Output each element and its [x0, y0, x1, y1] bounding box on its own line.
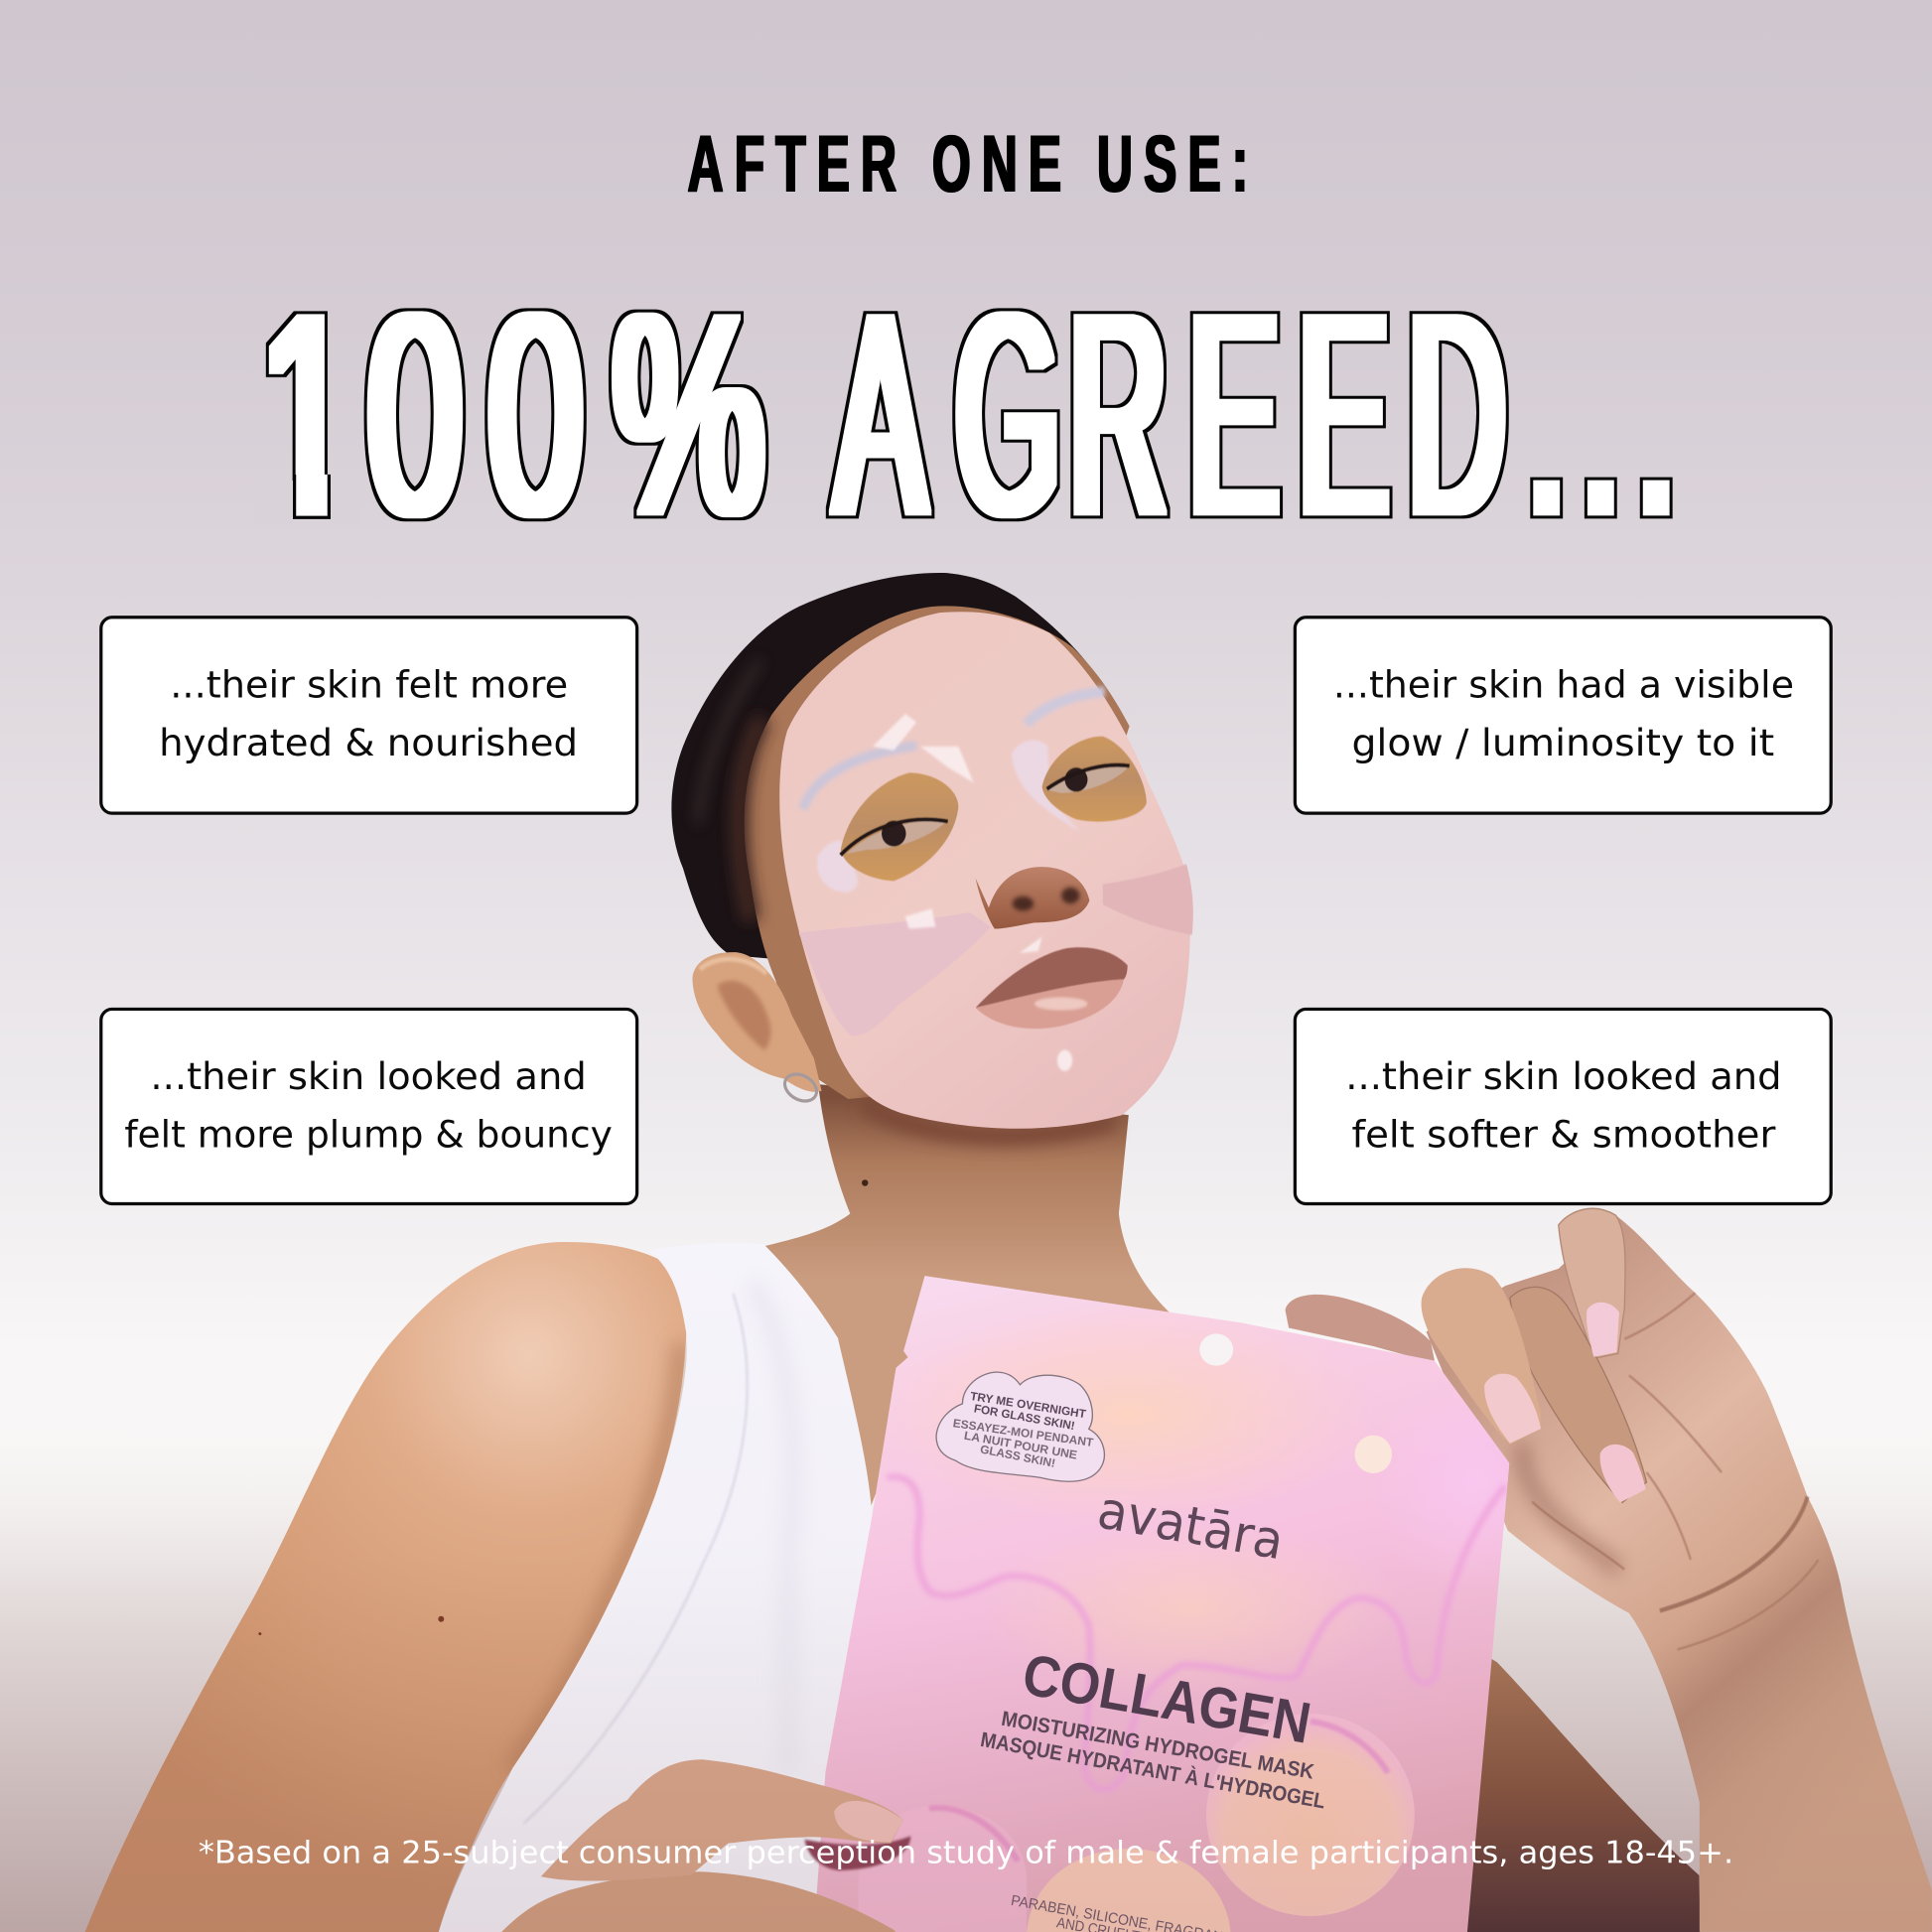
- nose opening: [976, 867, 1089, 929]
- package text: [952, 1390, 1327, 1932]
- product subtitle english: MOISTURIZING HYDROGEL MASK: [1000, 1708, 1316, 1784]
- right hand fingers over package: [1422, 1208, 1647, 1502]
- far upper arm: [1453, 1651, 1701, 1932]
- callout: softer: ...their skin looked and: [1345, 1054, 1782, 1098]
- sticker text: FOR GLASS SKIN!: [973, 1402, 1076, 1433]
- lips: [976, 947, 1128, 1029]
- hair shine: [698, 661, 760, 823]
- callout: softer: [1295, 1009, 1831, 1204]
- mask lower left flap: [799, 912, 991, 1036]
- index finger: [1286, 1295, 1435, 1363]
- hang hole: [1199, 1333, 1233, 1366]
- digit one base cover: [255, 475, 362, 525]
- finger front: [1422, 1268, 1541, 1445]
- left eye opening: [841, 772, 958, 881]
- main heading: [259, 254, 1675, 575]
- tank top fold: [523, 1294, 748, 1824]
- palm creases: [1532, 1293, 1819, 1649]
- ear: [692, 952, 822, 1092]
- forehead and side skin: [745, 606, 1130, 1099]
- sticker text: TRY ME OVERNIGHT: [969, 1390, 1088, 1421]
- cloud sticker: [936, 1372, 1104, 1481]
- white tank top: [439, 1243, 873, 1932]
- neck and chest: [761, 1084, 1182, 1528]
- mild overall bottom tint: [0, 1553, 1932, 1932]
- woman with sheet mask: [85, 573, 1932, 1932]
- callout: plump: [101, 1009, 637, 1204]
- brand name: avatāra: [1093, 1480, 1288, 1572]
- callout: glow: [1295, 618, 1831, 813]
- finger holding top: [1559, 1208, 1625, 1358]
- product package: [814, 1276, 1581, 1932]
- head group: [671, 573, 1193, 1136]
- hair: [671, 573, 1126, 961]
- lower hand finger two: [501, 1871, 896, 1932]
- callout: glow: ...their skin had a visible: [1333, 662, 1794, 706]
- callout: hydrated: [101, 618, 637, 813]
- nail 2: [1600, 1445, 1646, 1502]
- callout: plump: ...their skin looked and: [150, 1054, 587, 1098]
- hand and forearm: [1427, 1215, 1932, 1932]
- mask right flap: [1103, 864, 1193, 935]
- left brow under mask: [802, 746, 916, 809]
- earring: [780, 1069, 821, 1106]
- arm moles: [258, 1616, 444, 1635]
- right eye opening: [1042, 737, 1147, 822]
- lower hand index finger: [541, 1759, 903, 1881]
- small heading: AFTER ONE USE:: [688, 119, 1248, 208]
- left eye patch glow: [817, 841, 858, 893]
- sheet mask: [779, 612, 1190, 1129]
- sticker text: ESSAYEZ-MOI PENDANT: [952, 1417, 1095, 1449]
- callout: softer: felt softer & smoother: [1351, 1112, 1776, 1156]
- right brow under mask: [1026, 692, 1105, 724]
- palm shadow by package: [1523, 1444, 1620, 1570]
- sticker text: GLASS SKIN!: [979, 1443, 1056, 1470]
- right hand and forearm silhouette: [1286, 1215, 1932, 1932]
- nail 1: [1484, 1374, 1541, 1444]
- lower hand: [501, 1759, 910, 1932]
- right eye patch glow: [1012, 741, 1080, 832]
- left upper arm: [85, 1242, 686, 1932]
- product name: COLLAGEN: [1018, 1642, 1315, 1756]
- sticker text: LA NUIT POUR UNE: [963, 1430, 1078, 1462]
- heading agreed: AGREED...: [835, 254, 1675, 574]
- callout: hydrated: ...their skin felt more: [170, 662, 568, 706]
- armpit shadow: [511, 1343, 681, 1769]
- tank shading: [752, 1282, 793, 1774]
- product subtitle french: MASQUE HYDRATANT À L'HYDROGEL: [979, 1728, 1327, 1814]
- nail shadow on package: [804, 1836, 910, 1870]
- package artwork: [859, 1305, 1581, 1932]
- background bottom tint: [0, 1442, 1932, 1932]
- footnote: *Based on a 25-subject consumer perception study of male & female participants, ages 18-45+.: [199, 1835, 1733, 1870]
- mask highlights: [873, 714, 1072, 1071]
- callout: hydrated: hydrated & nourished: [159, 721, 578, 764]
- chin shadow: [864, 1103, 1114, 1136]
- finger center: [1510, 1287, 1647, 1502]
- neck mole: [862, 1179, 868, 1186]
- heading percent: 100%: [259, 255, 764, 575]
- callout: glow: glow / luminosity to it: [1351, 721, 1774, 764]
- callout: plump: felt more plump & bouncy: [124, 1112, 613, 1156]
- lower hand nail: [834, 1801, 903, 1842]
- sticker text: [952, 1390, 1095, 1470]
- temple shadow: [740, 718, 762, 920]
- nail 3: [1587, 1303, 1619, 1357]
